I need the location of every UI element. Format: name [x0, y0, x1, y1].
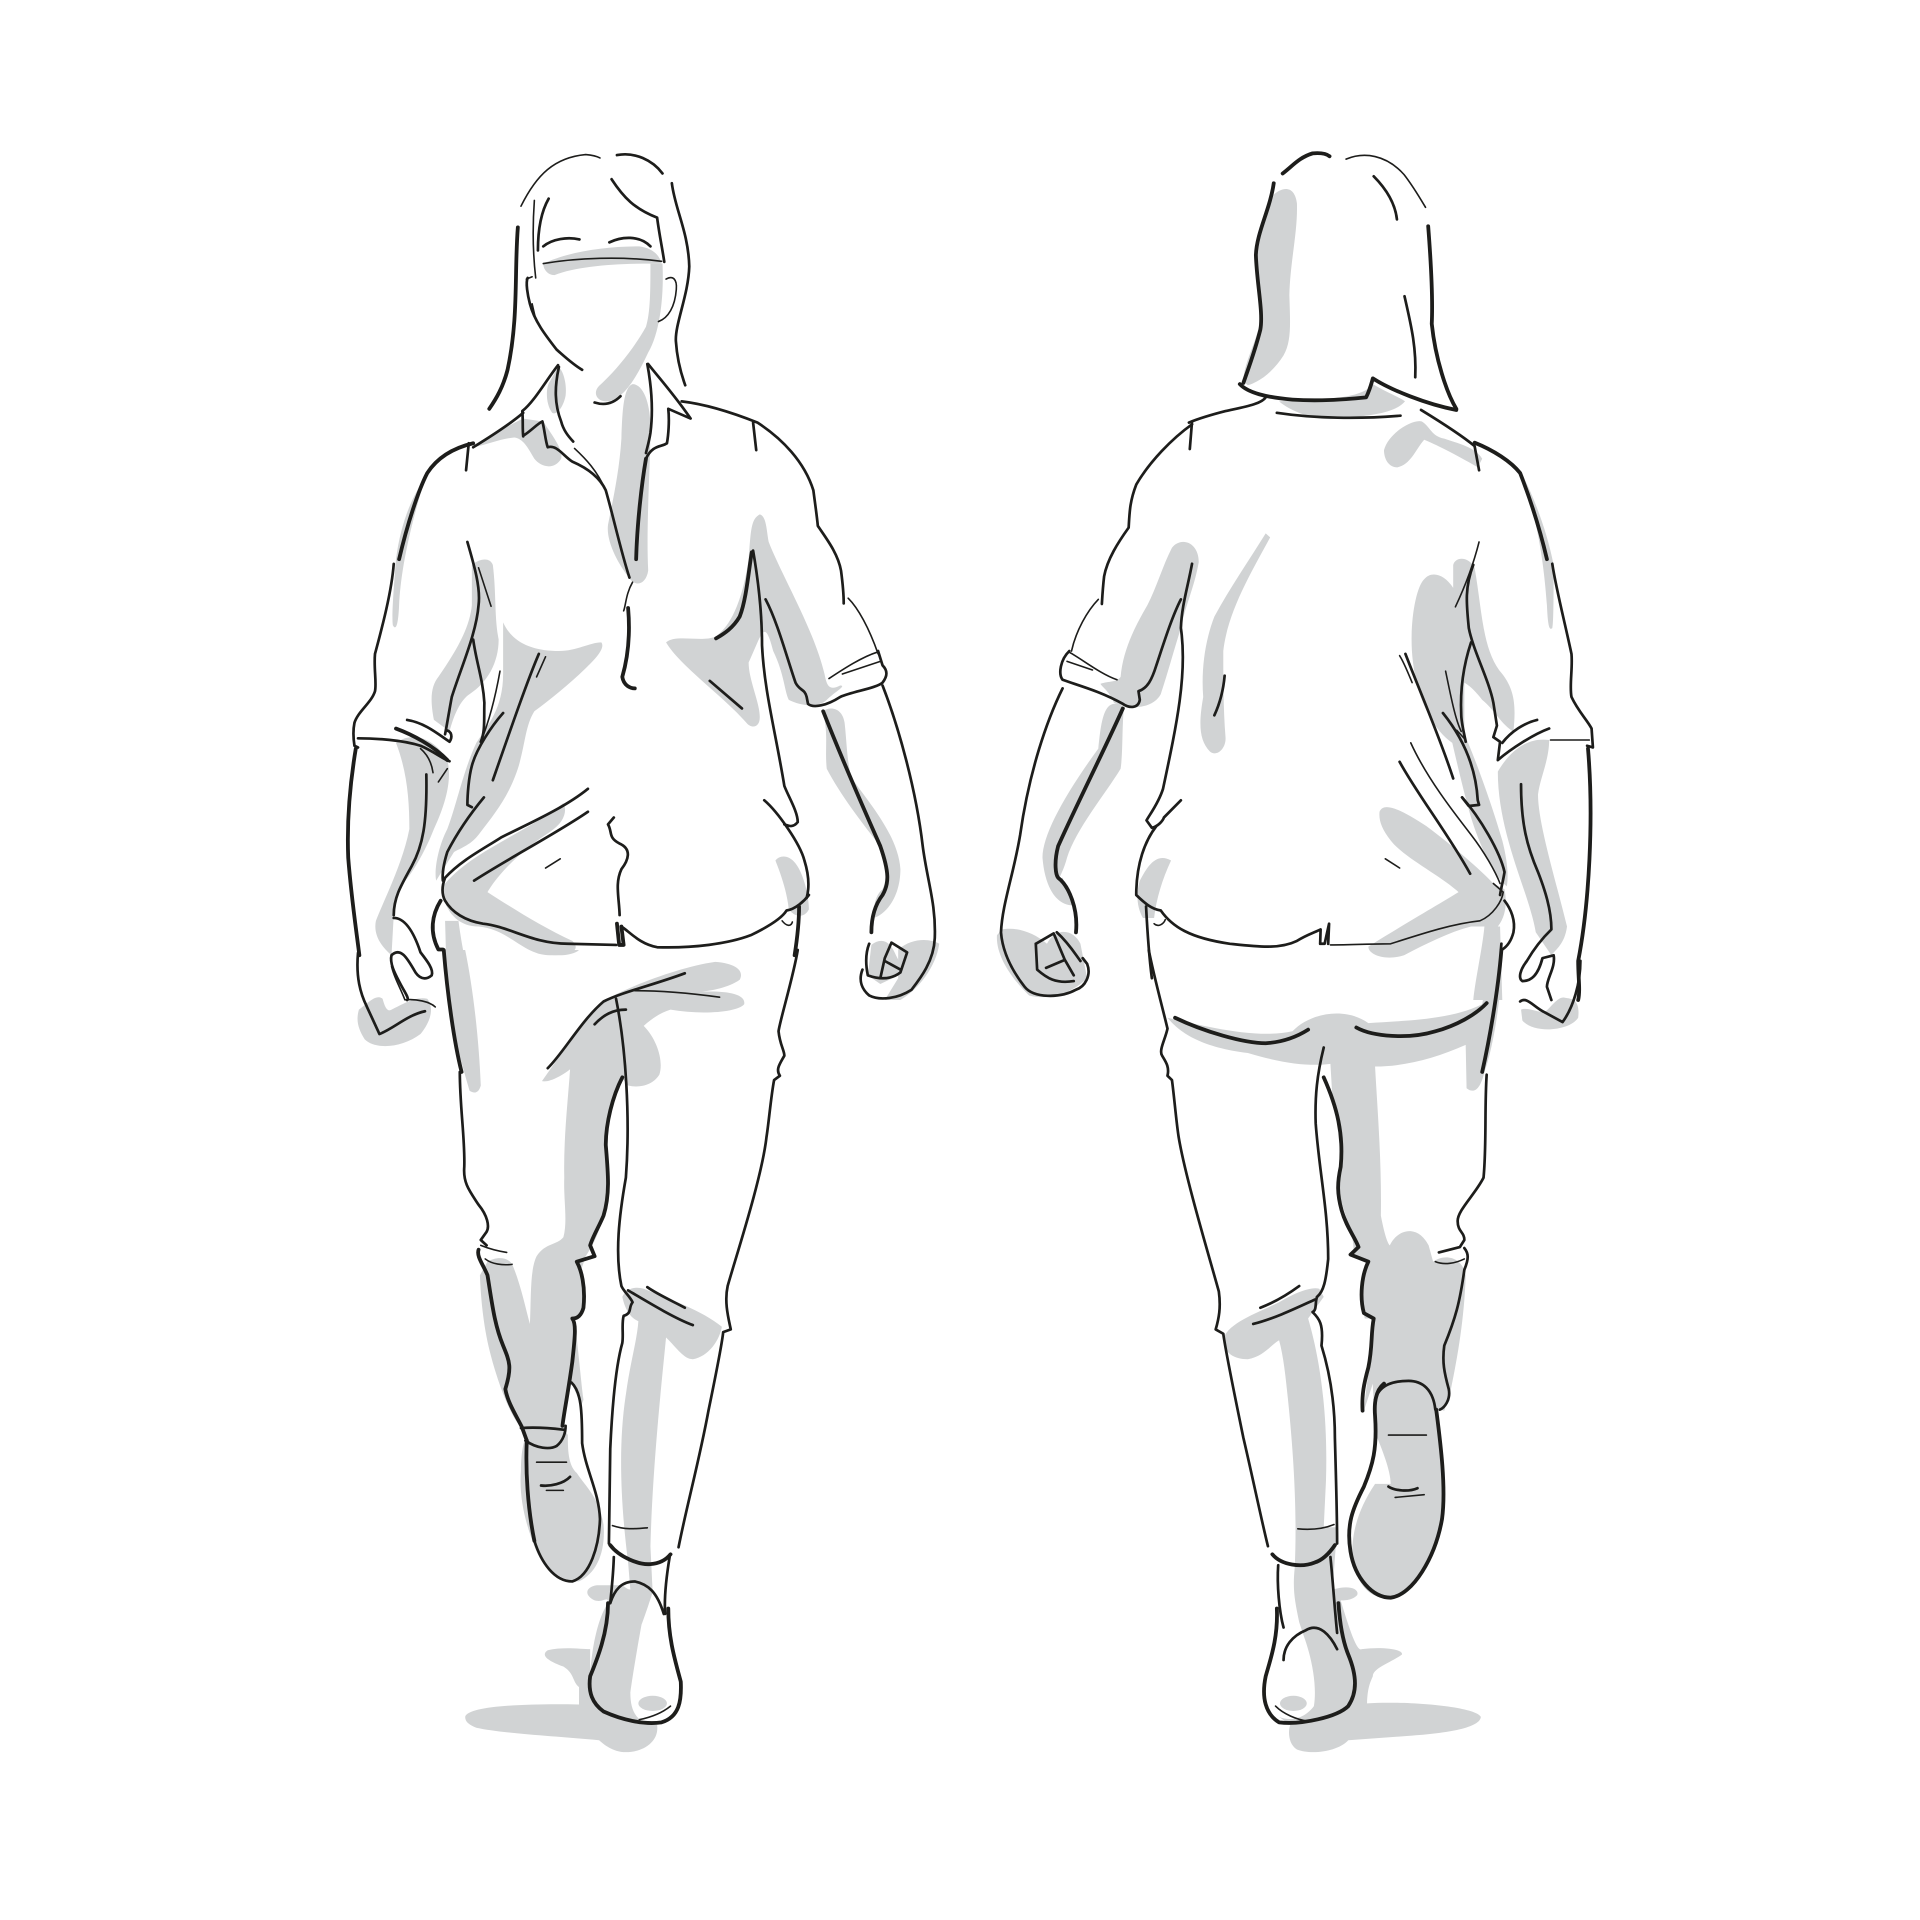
- back lower shadows: [1167, 950, 1579, 1752]
- back upper shadows: [997, 189, 1567, 1000]
- front lower body: [357, 950, 798, 1752]
- back upper thick lines: [1056, 153, 1591, 1000]
- front upper thin lines: [421, 155, 880, 925]
- front lower shadows: [358, 950, 744, 1752]
- figure: back view: [997, 153, 1593, 1752]
- front lower thin lines: [392, 966, 720, 1720]
- front upper shadows: [375, 246, 939, 1000]
- front upper body: [348, 154, 939, 1000]
- back upper medium lines: [1001, 176, 1593, 1000]
- back lower medium lines: [1149, 950, 1580, 1660]
- front upper medium lines: [353, 154, 935, 1000]
- front lower medium lines: [357, 950, 798, 1614]
- back upper body: [997, 153, 1593, 1000]
- back lower thin lines: [1276, 1259, 1464, 1721]
- figure: front view: [348, 154, 939, 1752]
- back lower body: [1149, 950, 1580, 1752]
- front lower thick lines: [444, 950, 681, 1723]
- back upper thin lines: [1067, 155, 1589, 945]
- front upper thick lines: [348, 227, 887, 955]
- back lower thick lines: [1175, 950, 1501, 1723]
